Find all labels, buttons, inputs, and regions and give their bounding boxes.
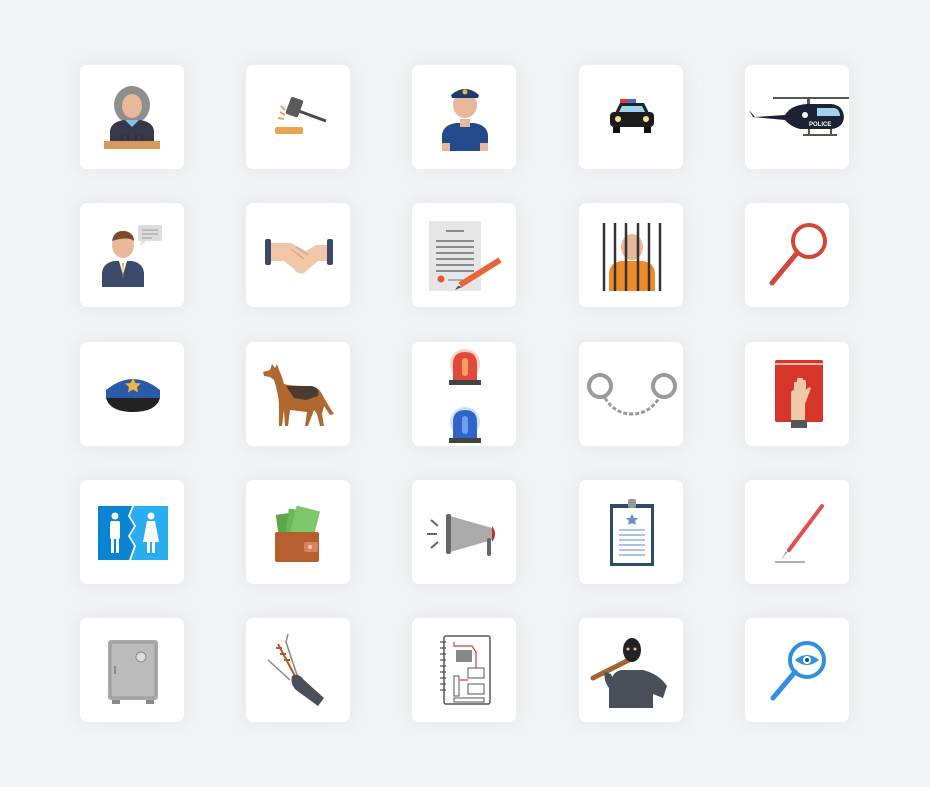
icon: police cap (106, 378, 160, 412)
card: handshake (245, 202, 351, 308)
icon: handshake (265, 239, 333, 274)
icon: clipboard report (610, 499, 654, 566)
icon: safe (108, 640, 158, 704)
card: police officer (411, 64, 517, 170)
card: sirens (411, 341, 517, 447)
icon: scalpel (775, 506, 822, 562)
card: magnifier (744, 202, 850, 308)
card: scalpel (744, 479, 850, 585)
icon: lawyer with speech bubble (102, 225, 162, 287)
card: police car (578, 64, 684, 170)
icon: handcuffs (589, 375, 675, 414)
card: heist plan (411, 617, 517, 723)
icon: red and blue sirens (449, 349, 481, 443)
icon: contract (429, 221, 500, 291)
icon: hand with lockpicks (268, 634, 324, 706)
icon: magnifying glass red (772, 225, 825, 283)
icon: megaphone (427, 514, 495, 556)
icon: german shepherd (263, 364, 334, 426)
icon: wallet with money (275, 506, 320, 562)
icon: hand on book (775, 360, 823, 428)
card: gavel (245, 64, 351, 170)
icon: judge (104, 86, 160, 149)
card: police cap (79, 341, 185, 447)
card: search eye (744, 617, 850, 723)
card: police helicopter (744, 64, 850, 170)
card: divorce (79, 479, 185, 585)
card: oath book (744, 341, 850, 447)
card: wallet (245, 479, 351, 585)
icon: police car (610, 99, 654, 133)
icon: divorce split (98, 506, 168, 560)
icon: gavel (275, 96, 326, 134)
card: burglar (578, 617, 684, 723)
card: lawyer (79, 202, 185, 308)
card: handcuffs (578, 341, 684, 447)
card: document and pen (411, 202, 517, 308)
card: safe (79, 617, 185, 723)
icon: prisoner behind bars (604, 223, 660, 291)
card: clipboard (578, 479, 684, 585)
icon: magnifier with eye (773, 643, 824, 698)
icon: heist plan (440, 636, 490, 704)
icon: burglar with bat (593, 638, 667, 708)
card: judge (79, 64, 185, 170)
icon: helicopter: POLICE (809, 122, 831, 128)
card: megaphone (411, 479, 517, 585)
card: lockpick (245, 617, 351, 723)
icon: police officer (442, 89, 488, 151)
card: prisoner (578, 202, 684, 308)
card: police dog (245, 341, 351, 447)
